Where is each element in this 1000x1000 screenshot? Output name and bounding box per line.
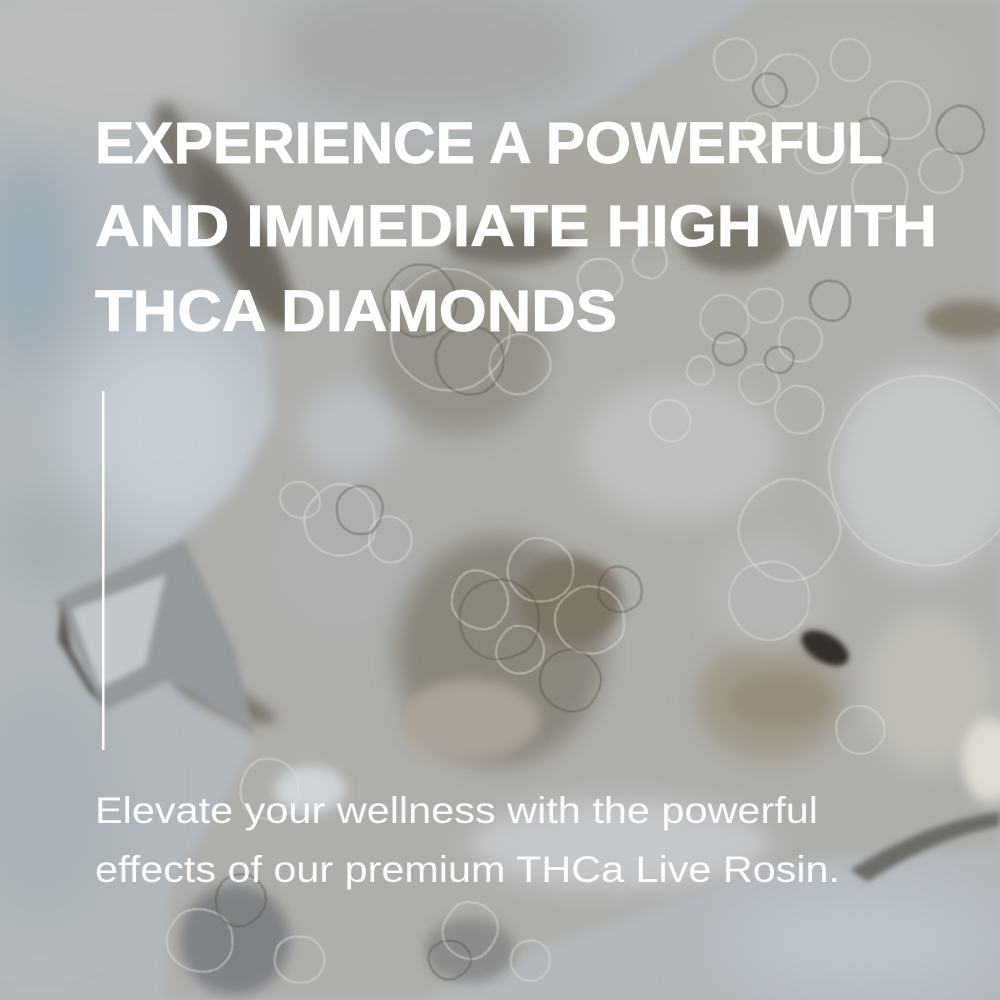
body text: Elevate your wellness with the powerful [95,790,818,831]
vertical divider line [102,391,104,750]
body text [95,790,840,890]
heading [95,111,937,344]
body text: effects of our premium THCa Live Rosin. [95,849,840,890]
heading: EXPERIENCE A POWERFUL [95,111,883,176]
heading: THCA DIAMONDS [95,279,617,344]
heading: AND IMMEDIATE HIGH WITH [95,194,937,259]
